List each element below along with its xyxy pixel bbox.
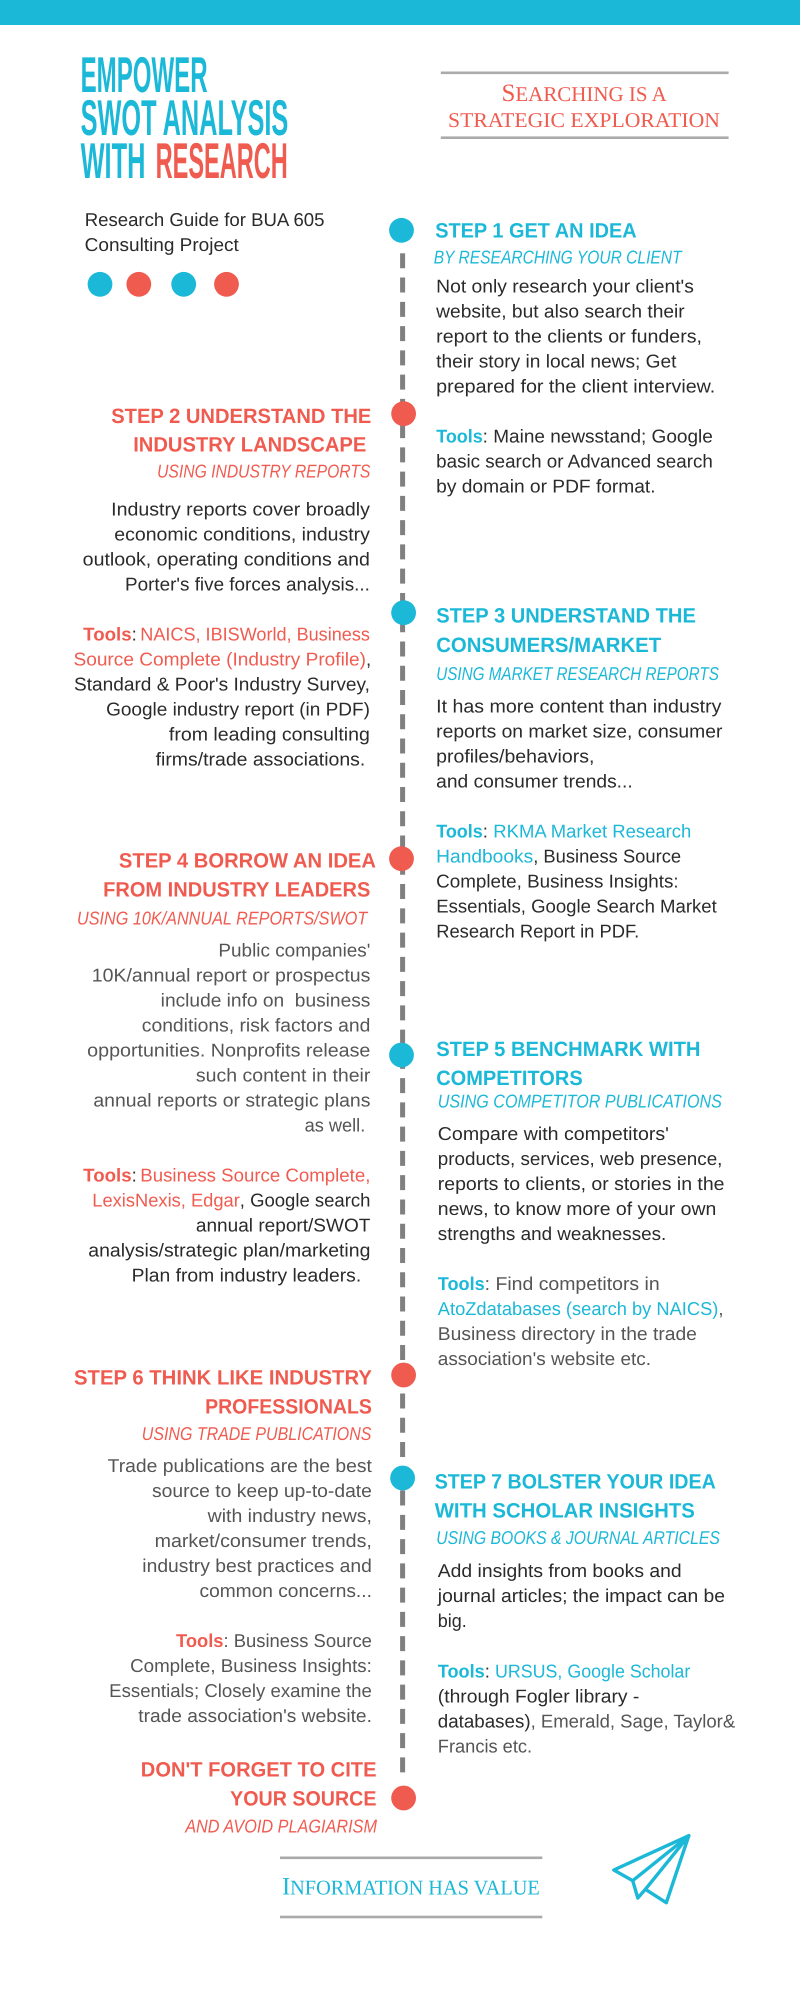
panel: step 4: 10K/annual report or prospectus	[92, 965, 370, 986]
timeline: step dots	[389, 218, 416, 1810]
panel: step 6: source to keep up-to-date	[152, 1480, 372, 1501]
panel: step 4: FROM INDUSTRY LEADERS	[103, 879, 371, 902]
subtitle: research guide: Consulting Project	[85, 234, 240, 255]
panel: step 6	[74, 1366, 373, 1726]
panel: step 1: STEP 1 GET AN IDEA	[435, 220, 637, 243]
panel: step 2: firms/trade associations.	[156, 749, 365, 770]
panel: step 2: USING INDUSTRY REPORTS	[157, 460, 371, 481]
panel: step 7: big.	[438, 1610, 467, 1631]
title: EMPOWER	[81, 46, 208, 103]
panel: step 1: Tools	[436, 425, 483, 446]
panel: step 1: basic search or Advanced search	[436, 450, 713, 471]
panel: step 3: and consumer trends...	[436, 770, 633, 791]
timeline: dashed line	[400, 253, 405, 1773]
panel: step 6: PROFESSIONALS	[205, 1395, 372, 1418]
panel: step 2	[74, 405, 372, 770]
panel: step 6: market/consumer trends,	[155, 1530, 372, 1551]
panel: step 7: :	[485, 1660, 490, 1681]
panel: step 4: conditions, risk factors and	[142, 1015, 370, 1036]
top banner	[0, 0, 800, 25]
panel: step 4: , Google search	[240, 1190, 370, 1211]
panel: step 3: profiles/behaviors,	[436, 745, 594, 766]
panel: step 4: LexisNexis, Edgar	[92, 1190, 240, 1211]
panel: step 7: Francis etc.	[438, 1735, 532, 1756]
panel: step 5: ,	[718, 1298, 724, 1319]
panel: step 2: INDUSTRY LANDSCAPE	[133, 434, 366, 457]
panel: step 7	[435, 1470, 736, 1756]
panel: step 2: Standard & Poor's Industry Survey,	[74, 674, 370, 695]
panel: step 5: Business directory in the trade	[438, 1323, 697, 1344]
panel: step 5: COMPETITORS	[436, 1067, 583, 1090]
panel: step 2: Porter's five forces analysis...	[125, 574, 370, 595]
panel: step 7: Add insights from books and	[438, 1560, 682, 1581]
panel: step 6: Essentials; Closely examine the	[109, 1680, 372, 1701]
panel: step 1: BY RESEARCHING YOUR CLIENT	[434, 246, 683, 267]
callout: information has value: INFORMATION HAS VALUE	[282, 1873, 540, 1900]
panel: step 6: Complete, Business Insights:	[130, 1655, 372, 1676]
panel: step 5: news, to know more of your own	[438, 1198, 716, 1219]
title	[81, 46, 288, 189]
panel: step 2: outlook, operating conditions and	[83, 549, 370, 570]
panel: don't forget to cite: DON'T FORGET TO CITE	[141, 1759, 377, 1782]
panel: step 2: Tools	[83, 624, 132, 645]
panel: step 3: reports on market size, consumer	[436, 720, 722, 741]
panel: step 3: Essentials, Google Search Market	[436, 895, 718, 916]
panel: step 7: USING BOOKS & JOURNAL ARTICLES	[436, 1527, 720, 1548]
panel: step 5: strengths and weaknesses.	[438, 1223, 666, 1244]
panel: step 3: CONSUMERS/MARKET	[436, 634, 661, 657]
panel: step 2: STEP 2 UNDERSTAND THE	[111, 405, 372, 428]
panel: step 3: RKMA Market Research	[493, 820, 691, 841]
panel: step 1: their story in local news; Get	[436, 350, 677, 371]
subtitle: research guide: Research Guide for BUA 605	[85, 209, 324, 230]
panel: step 1: report to the clients or funders,	[436, 325, 702, 346]
panel: step 7: WITH SCHOLAR INSIGHTS	[435, 1499, 695, 1522]
panel: step 3: STEP 3 UNDERSTAND THE	[436, 605, 696, 628]
panel: step 6: with industry news,	[207, 1505, 372, 1526]
panel: don't forget to cite	[141, 1759, 377, 1836]
panel: step 5: association's website etc.	[438, 1348, 651, 1369]
panel: step 7: URSUS, Google Scholar	[495, 1660, 690, 1681]
panel: step 2: :	[132, 624, 137, 645]
title: SWOT ANALYSIS	[81, 89, 288, 146]
panel: step 1: Not only research your client's	[436, 275, 694, 296]
panel: don't forget to cite: AND AVOID PLAGIARISM	[184, 1815, 377, 1836]
panel: step 4: annual report/SWOT	[196, 1215, 370, 1236]
panel: step 1: website, but also search their	[435, 300, 685, 321]
panel: step 4: Public companies'	[218, 940, 370, 961]
panel: step 6: industry best practices and	[142, 1555, 372, 1576]
panel: step 3: , Business Source	[533, 845, 681, 866]
panel: step 5: reports to clients, or stories in the	[438, 1173, 724, 1194]
panel: step 1: prepared for the client interview.	[436, 375, 715, 396]
panel: step 3: It has more content than industry	[436, 695, 722, 716]
panel: step 7: , Emerald, Sage, Taylor&	[531, 1710, 736, 1731]
panel: step 2: NAICS, IBISWorld, Business	[140, 624, 370, 645]
panel: step 3: USING MARKET RESEARCH REPORTS	[436, 663, 719, 684]
icon: paper plane	[614, 1836, 689, 1903]
panel: step 3: Complete, Business Insights:	[436, 870, 679, 891]
panel: step 4: USING 10K/ANNUAL REPORTS/SWOT	[77, 907, 369, 928]
panel: step 6: STEP 6 THINK LIKE INDUSTRY	[74, 1366, 372, 1389]
panel: step 1: : Maine newsstand; Google	[483, 425, 713, 446]
panel: step 4: STEP 4 BORROW AN IDEA	[119, 850, 376, 873]
panel: step 4	[77, 850, 376, 1286]
panel: step 4: Business Source Complete,	[140, 1165, 370, 1186]
panel: step 2: Google industry report (in PDF)	[106, 699, 370, 720]
callout: searching is a strategic exploration	[441, 72, 729, 139]
panel: step 5: products, services, web presence,	[438, 1148, 722, 1169]
title: WITH	[81, 132, 145, 189]
panel: step 1: by domain or PDF format.	[436, 475, 656, 496]
panel: step 6: common concerns...	[200, 1580, 372, 1601]
panel: step 7: (through Fogler library -	[438, 1685, 639, 1706]
panel: step 3	[436, 605, 722, 941]
panel: step 5: Tools	[438, 1273, 485, 1294]
panel: step 5: Compare with competitors'	[438, 1123, 669, 1144]
callout: searching is a strategic exploration: SEARCHING IS A	[502, 80, 668, 107]
panel: step 1	[434, 220, 715, 496]
panel: step 4: include info on business	[161, 990, 370, 1011]
panel: step 2: from leading consulting	[169, 724, 370, 745]
panel: step 5: STEP 5 BENCHMARK WITH	[436, 1038, 700, 1061]
panel: step 4: such content in their	[196, 1065, 370, 1086]
panel: step 4: as well.	[305, 1115, 365, 1136]
panel: step 5	[436, 1038, 724, 1369]
panel: step 4: annual reports or strategic plans	[93, 1090, 370, 1111]
panel: step 3: Tools	[436, 820, 483, 841]
panel: step 5: USING COMPETITOR PUBLICATIONS	[438, 1091, 722, 1112]
panel: step 6: trade association's website.	[138, 1705, 372, 1726]
panel: step 4: Tools	[83, 1165, 132, 1186]
panel: step 7: STEP 7 BOLSTER YOUR IDEA	[435, 1470, 716, 1493]
panel: don't forget to cite: YOUR SOURCE	[230, 1788, 377, 1811]
subtitle: research guide	[85, 209, 324, 255]
panel: step 7: journal articles; the impact can be	[437, 1585, 725, 1606]
panel: step 4: analysis/strategic plan/marketing	[88, 1240, 370, 1261]
panel: step 2: Source Complete (Industry Profile)	[74, 649, 366, 670]
panel: step 6: Trade publications are the best	[108, 1455, 373, 1476]
panel: step 2: economic conditions, industry	[114, 524, 371, 545]
panel: step 3: Handbooks	[436, 845, 533, 866]
panel: step 3: :	[483, 820, 488, 841]
panel: step 6: Tools	[176, 1630, 224, 1651]
panel: step 7: Tools	[438, 1660, 485, 1681]
panel: step 2: Industry reports cover broadly	[111, 499, 371, 520]
decorative dot row	[88, 272, 239, 297]
panel: step 4: opportunities. Nonprofits release	[87, 1040, 370, 1061]
callout: searching is a strategic exploration: STRATEGIC EXPLORATION	[448, 108, 720, 132]
panel: step 7: databases)	[438, 1710, 531, 1731]
panel: step 6: : Business Source	[224, 1630, 372, 1651]
panel: step 6: USING TRADE PUBLICATIONS	[142, 1423, 372, 1444]
panel: step 2: ,	[366, 649, 371, 670]
panel: step 4: Plan from industry leaders.	[132, 1265, 361, 1286]
text: RESEARCH	[156, 132, 288, 189]
panel: step 3: Research Report in PDF.	[436, 920, 639, 941]
panel: step 5: AtoZdatabases (search by NAICS)	[438, 1298, 718, 1319]
panel: step 5: : Find competitors in	[485, 1273, 660, 1294]
panel: step 4: :	[132, 1165, 137, 1186]
